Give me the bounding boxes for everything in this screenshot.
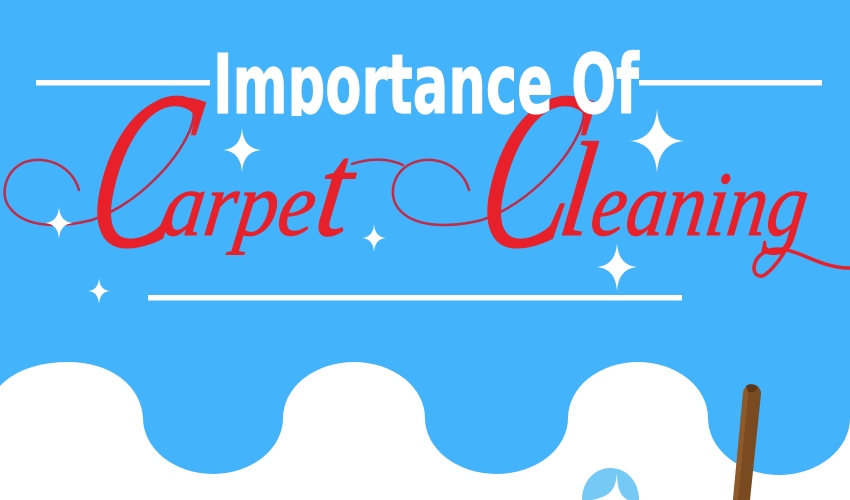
- icon: mop handle: [733, 384, 761, 500]
- sparkle 4: [88, 278, 110, 304]
- white scalloped carpet edge: [0, 362, 850, 500]
- word: Cleaning: leaning: [552, 116, 820, 265]
- sparkle 3: [362, 224, 386, 252]
- word: Carpet: C: [69, 46, 218, 296]
- rule: top right: [639, 80, 822, 86]
- sparkle 6: [597, 243, 637, 291]
- icon: light blue dome: [582, 468, 639, 500]
- sparkle 1: [223, 128, 261, 172]
- word: Carpet: [5, 46, 403, 296]
- sparkle 2: [45, 207, 73, 239]
- title: Carpet Cleaning script: [5, 46, 850, 296]
- sparkle 5: [630, 109, 684, 173]
- rule: bottom: [148, 295, 682, 300]
- rule: top left: [36, 80, 210, 86]
- sparkles: [45, 109, 684, 304]
- word: Cleaning: C: [459, 46, 608, 296]
- word: Carpet: arpet: [156, 115, 365, 264]
- word: Cleaning: [393, 46, 850, 296]
